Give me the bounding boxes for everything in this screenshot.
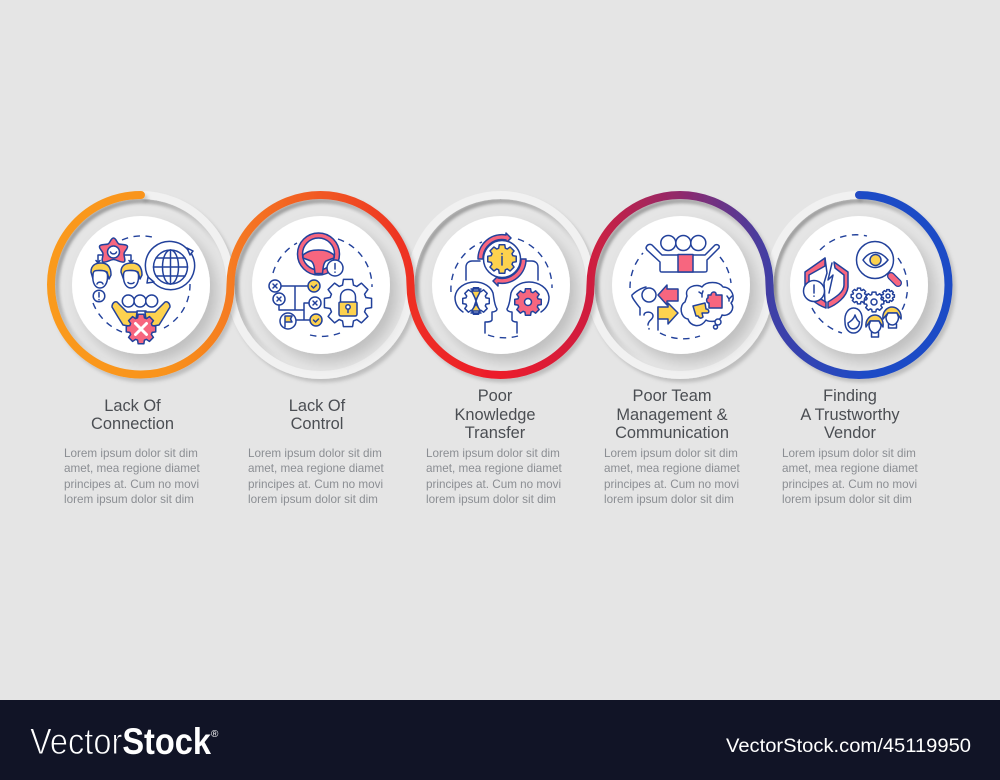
broken shield (805, 258, 848, 308)
heading: lack of connection: Connection (91, 415, 174, 433)
heading: finding a trustworthy vendor: Vendor (824, 424, 877, 442)
heading: poor team management and communication: Management & (616, 406, 728, 424)
gears (851, 288, 894, 312)
globe (145, 241, 195, 290)
text block: column 2: amet, mea regione diamet (248, 462, 385, 475)
right head with gear (507, 282, 549, 333)
heading: poor knowledge transfer: Transfer (465, 424, 526, 442)
text block: column 2: principes at. Cum no movi (248, 478, 383, 491)
text block: column 5: amet, mea regione diamet (782, 462, 919, 475)
gradient flow line (51, 195, 948, 375)
heading: lack of control: Lack Of (289, 397, 345, 415)
team (646, 236, 719, 272)
footer bar (0, 700, 1000, 780)
alert badge (93, 290, 105, 302)
steering wheel (298, 233, 340, 275)
text block: column 3: Lorem ipsum dolor sit dim (426, 447, 560, 460)
panel: inset circle shading (58, 202, 942, 368)
text block: column 1: amet, mea regione diamet (64, 462, 201, 475)
text block: column 2: lorem ipsum dolor sit dim (248, 493, 378, 506)
icon: finding a trustworthy vendor (804, 235, 907, 337)
text block: column 3: principes at. Cum no movi (426, 478, 561, 491)
heading: poor knowledge transfer: Poor (478, 387, 512, 405)
footer image id: VectorStock.com/45119950 (726, 736, 971, 757)
confused person (632, 287, 658, 330)
people (845, 307, 901, 337)
heading: finding a trustworthy vendor: A Trustworthy (800, 406, 900, 424)
gear with lock (324, 279, 372, 327)
info gear (484, 240, 520, 278)
direction arrows (658, 285, 678, 324)
text block: column 3: lorem ipsum dolor sit dim (426, 493, 556, 506)
footer logo: VectorStock (30, 721, 211, 762)
icon: poor knowledge transfer (451, 233, 552, 338)
heading: poor knowledge transfer: Knowledge (454, 406, 536, 424)
text block: column 4: lorem ipsum dolor sit dim (604, 493, 734, 506)
text block: column 3: amet, mea regione diamet (426, 462, 563, 475)
heading: lack of control: Control (291, 415, 343, 433)
text block: column 4: amet, mea regione diamet (604, 462, 741, 475)
panel: white discs (72, 216, 928, 354)
alert badge (327, 260, 343, 276)
neutral head (121, 263, 142, 288)
panel: gray ring track (141, 195, 859, 375)
text block: column 2: Lorem ipsum dolor sit dim (248, 447, 382, 460)
heading: finding a trustworthy vendor: Finding (823, 387, 877, 405)
heading: poor team management and communication: Poor Team (633, 387, 711, 405)
heading: lack of connection: Lack Of (104, 397, 161, 415)
sad head (91, 263, 111, 288)
text block: column 5: Lorem ipsum dolor sit dim (782, 447, 916, 460)
thought cloud with puzzle (681, 282, 733, 329)
connectors (466, 261, 538, 280)
decision tree (269, 280, 322, 329)
team with gear (112, 295, 170, 344)
text block: column 5: principes at. Cum no movi (782, 478, 917, 491)
registered mark: ® (211, 729, 219, 740)
alert badge (804, 280, 824, 302)
cycle arrows (478, 233, 526, 286)
star with face (96, 238, 133, 263)
icon: lack of control (269, 233, 372, 336)
text block: column 4: Lorem ipsum dolor sit dim (604, 447, 738, 460)
text block: column 1: Lorem ipsum dolor sit dim (64, 447, 198, 460)
text block: column 4: principes at. Cum no movi (604, 478, 739, 491)
text block: column 1: lorem ipsum dolor sit dim (64, 493, 194, 506)
icon: poor team management and communication (630, 236, 733, 339)
magnifier with eye (856, 242, 898, 283)
left head with hourglass (455, 282, 497, 333)
icon: lack of connection (91, 236, 195, 344)
heading: poor team management and communication: Communication (615, 424, 729, 442)
text block: column 5: lorem ipsum dolor sit dim (782, 493, 912, 506)
text block: column 1: principes at. Cum no movi (64, 478, 199, 491)
